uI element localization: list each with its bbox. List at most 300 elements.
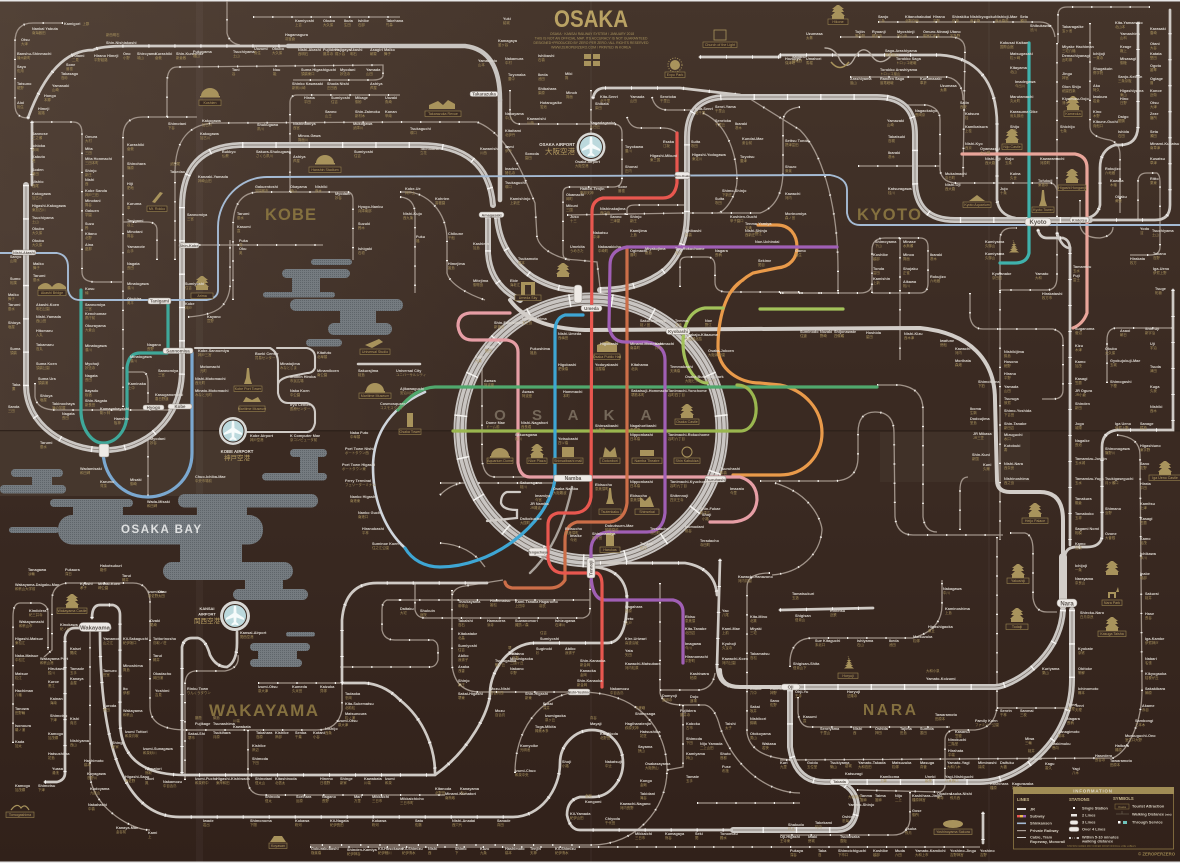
station labels: Hyogo north-west: 仏教 xyxy=(222,153,229,158)
station labels: Nara corridor: 猿投 xyxy=(1140,425,1147,430)
station labels: east Osaka and Kyoto: Imadegawa xyxy=(1015,80,1035,84)
station labels: Kobe: Minatogawa xyxy=(127,282,149,286)
station labels: Hyogo north-west: 福山 xyxy=(193,53,200,58)
station labels: Kobe: Tarumi xyxy=(33,274,45,278)
station labels: Kobe: 神戸三宮 xyxy=(198,352,212,357)
station labels: Hyogo north-west: Sumiyoshi xyxy=(185,282,204,286)
station labels: central Osaka north: Higashi-Yodogawa xyxy=(692,153,726,157)
station labels: Wakayama: 開成 xyxy=(70,650,77,655)
station labels: central Osaka north: 天六 xyxy=(675,250,682,255)
station labels: east Osaka and Kyoto: Hirakata xyxy=(1130,257,1145,261)
station labels: Nara corridor: Ikoma xyxy=(970,407,981,411)
station labels: Hyogo north-west: Minoo-Gawa xyxy=(298,134,321,138)
station labels: Wakayama: 太田 xyxy=(158,593,165,598)
station labels: east Osaka and Kyoto: 雄琴 xyxy=(1150,67,1157,72)
station labels: south Osaka and Wakayama: Mayaji xyxy=(590,722,602,726)
legend: stations column: 3 Lines xyxy=(1082,820,1095,824)
station labels: Kobe: Universal City xyxy=(396,369,421,373)
station labels: south Osaka and Wakayama: 中辻 xyxy=(605,763,612,768)
station labels: south Osaka and Wakayama: Nishi-Anadai xyxy=(452,819,475,823)
tourist attractions: Church of the Light xyxy=(705,43,735,47)
title: OSAKA xyxy=(554,6,628,33)
tourist attractions: Osaka Public Hall xyxy=(593,355,621,359)
station labels: east Osaka and Kyoto: Nishioji-Mae xyxy=(995,15,1017,19)
station labels: Hyogo north-west: Nishio xyxy=(32,180,44,184)
station labels: Hyogo north-west: 倉敷 xyxy=(127,146,134,151)
station labels: east Osaka and Kyoto: Daigo xyxy=(1118,115,1129,119)
station labels: south Osaka and Wakayama: 姫松 xyxy=(490,602,497,607)
station labels: central Osaka north: 山田丘 xyxy=(590,124,601,129)
station labels: central Osaka north: 中津 xyxy=(593,234,600,239)
station labels: central Osaka north: Juso xyxy=(570,215,579,219)
station labels: Wakayama: 下田 xyxy=(252,761,259,765)
station labels: central Osaka north: Shinjo xyxy=(630,215,642,219)
station labels: Hyogo north-west: Yamada xyxy=(366,68,380,72)
station labels: Wakayama: Nishijo xyxy=(325,727,338,731)
station labels: east Osaka and Kyoto: 今出川 xyxy=(1015,83,1026,88)
station labels: Kobe: Myohoji xyxy=(85,362,99,366)
station labels: central Osaka north: 関目 xyxy=(758,262,765,267)
station labels: east Osaka and Kyoto: Iwakura xyxy=(1093,95,1107,99)
station labels: central Osaka north: 山本 xyxy=(478,62,485,67)
station labels: Hyogo north-west: Shin-Kurashiki xyxy=(176,52,203,56)
station labels: south Osaka and Wakayama: 光明池 xyxy=(520,747,531,752)
station labels: Nara corridor: 長池 xyxy=(1075,442,1082,447)
station labels: central Osaka north: 塚本 xyxy=(518,260,525,265)
station labels: Wakayama: Wakayama Port xyxy=(40,657,68,661)
station labels: Kobe: 三宮 xyxy=(85,306,92,311)
station labels: east Osaka and Kyoto: Kowata xyxy=(1110,179,1124,183)
station labels: Nara corridor: Suminodo xyxy=(800,330,819,334)
station labels: Wakayama: Kawabata xyxy=(364,777,382,781)
station labels: inside loop: Shinsaibashi xyxy=(595,424,618,428)
station labels: east Osaka and Kyoto: 西京 xyxy=(965,145,972,150)
station labels: Nara corridor: 生駒 xyxy=(970,410,977,415)
station labels: Hyogo north-west: Shimotani xyxy=(168,122,186,126)
station labels: south Osaka and Wakayama: 新庄 xyxy=(458,682,465,687)
station labels: central Osaka north: 庄内 xyxy=(625,168,632,173)
station labels: Wakayama: Tarui xyxy=(122,574,131,578)
station labels: Hyogo north-west: Hiji xyxy=(127,182,133,186)
station labels: inside loop: 恵美須町 xyxy=(595,486,609,491)
station labels: central Osaka north: 池田 xyxy=(538,76,545,81)
station labels: east Osaka and Kyoto: Takaragaike xyxy=(1062,25,1084,29)
station labels: Hyogo north-west: Sayo xyxy=(17,65,26,69)
station labels: Hyogo north-west: 石垣 xyxy=(358,250,365,255)
station labels: south Osaka and Wakayama: 北野田 xyxy=(435,790,446,795)
station labels: south Osaka and Wakayama: 北野田 xyxy=(600,735,611,740)
station labels: Kobe: Minatojima xyxy=(280,362,300,366)
station labels: south Osaka and Wakayama: 西 xyxy=(428,851,432,855)
station labels: Wakayama: 北信太 xyxy=(275,780,286,785)
station labels: Kobe: Suminoe Koen xyxy=(372,542,399,546)
station labels: Hyogo north-west: Suzuki xyxy=(358,222,370,226)
station labels: inside loop: Momodani xyxy=(685,525,704,529)
station labels: central Osaka north: 十三 xyxy=(570,218,577,223)
station labels: Wakayama: 箱作 xyxy=(100,567,107,572)
station labels: Wakayama: 堺市 xyxy=(188,735,195,740)
station labels: Nara corridor: Kasagi xyxy=(1075,377,1087,381)
station labels: Hyogo north-west: Kobe xyxy=(185,302,194,306)
station labels: east Osaka and Kyoto: Takatsuki xyxy=(888,135,905,139)
station labels: Hyogo north-west: Akashi xyxy=(350,48,362,52)
station labels: east Osaka and Kyoto: Gojo xyxy=(1005,157,1014,161)
station labels: inside loop: Ebisucho xyxy=(595,483,612,487)
station labels: Wakayama: 九度山 xyxy=(90,790,101,795)
station labels: inside loop: 阿波座 xyxy=(522,393,533,398)
station labels: Kobe: Kaminaka xyxy=(128,382,146,386)
station labels: Kobe: Naka Koen xyxy=(290,389,310,393)
station labels: east Osaka and Kyoto: Kamishin xyxy=(873,277,890,281)
station labels: Wakayama: 貴志 xyxy=(70,720,77,725)
legend: symbols column: Walking Distance (min) xyxy=(1132,812,1172,816)
station labels: Kobe: Cosmosquare xyxy=(380,402,405,406)
station labels: Nara region west: ファミリー公園 xyxy=(975,722,999,727)
station labels: Wakayama: Higashi-Matsue xyxy=(15,637,43,641)
station labels: inside loop: Sakaisuji-Hommachi xyxy=(631,389,668,393)
station labels: south Osaka and Wakayama: Nishikori xyxy=(750,717,766,721)
station labels: east Osaka and Kyoto: 西院 xyxy=(960,104,967,109)
station labels: Nara corridor: Tsukigaseguchi xyxy=(1105,477,1133,481)
station labels: inside loop: Hommachi xyxy=(563,390,582,394)
station labels: south Osaka and Wakayama: 穴中 xyxy=(750,690,757,695)
station labels: Nara region west: 東丘 xyxy=(928,628,935,633)
interchange station boxes: Oji xyxy=(788,684,793,690)
station labels: Kobe: 長田 xyxy=(127,265,134,270)
station labels: Hyogo north-west: 妙法寺 xyxy=(340,71,351,76)
station labels: Nara region west: 大和上市 xyxy=(915,852,929,857)
station labels: inside loop: 新福島 xyxy=(494,324,505,329)
station labels: south Osaka and Wakayama: Kyuhoji xyxy=(722,642,736,646)
station labels: Wakayama: 泉大津 xyxy=(258,688,269,693)
station labels: central Osaka north: 豊津 xyxy=(740,158,747,163)
station labels: Nara corridor: 神楽坂 xyxy=(1012,785,1023,790)
station labels: Kobe: Suma xyxy=(10,347,20,351)
station labels: central Osaka north: 姫島 xyxy=(448,265,455,270)
station labels: east Osaka and Kyoto: Shojaku xyxy=(903,267,918,271)
station labels: Hyogo north-west: Minotani xyxy=(85,199,101,203)
station labels: east Osaka and Kyoto: 桂 xyxy=(965,115,969,120)
station labels: east Osaka and Kyoto: 木幡 xyxy=(1110,182,1117,187)
station labels: Hyogo north-west: Hirano Himeji xyxy=(94,54,118,58)
station labels: Hyogo north-west: 大久保 xyxy=(32,230,43,235)
station labels: inside loop: 心斎橋 xyxy=(595,427,606,432)
interchange station boxes: Nishi-Akashi xyxy=(13,251,35,255)
station labels: Nara corridor: 山田 xyxy=(1004,388,1011,393)
station labels: Nara corridor: 天理 xyxy=(1075,707,1082,712)
station labels: Nara region west: 王寺東 xyxy=(780,838,791,843)
station labels: south Osaka and Wakayama: Hagaromo xyxy=(539,600,558,604)
station labels: Hyogo north-west: 新倉敷 xyxy=(176,55,187,60)
station labels: inside loop: 大阪ビジネスパーク xyxy=(685,378,716,383)
tourist attractions: Kasuga Taisha xyxy=(1100,632,1124,636)
station labels: south Osaka and Wakayama: 百舌鳥西 xyxy=(490,690,504,695)
station labels: Wakayama: Hachiman xyxy=(15,689,33,693)
station labels: south Osaka and Wakayama: Takamatsu xyxy=(750,652,770,656)
station labels: Nara region west: Taima xyxy=(875,794,886,798)
station labels: south Osaka and Wakayama: 神野 xyxy=(770,690,777,695)
station labels: Nara corridor: Kuni xyxy=(983,463,991,467)
interchange station boxes: Takada xyxy=(833,780,847,784)
station labels: Nara corridor: Shijonawate xyxy=(834,330,856,334)
station labels: Hyogo north-west: Kakogawa xyxy=(200,132,219,136)
station labels: inside loop: 小路 xyxy=(702,516,709,521)
station labels: Nara region west: Asuka xyxy=(905,827,916,831)
station labels: Nara corridor: 下吉田 xyxy=(1004,412,1015,417)
station labels: south Osaka and Wakayama: Fukai xyxy=(543,702,553,706)
station labels: south Osaka and Wakayama: 佐藤 xyxy=(415,822,422,827)
station labels: south Osaka and Wakayama: Sakai xyxy=(750,705,760,709)
station labels: Wakayama: Nagano xyxy=(322,795,336,799)
station labels: Wakayama: Senba xyxy=(295,731,306,735)
title: DESIGNED+PRODUCED BY ZERO PER ZERO / ALL RIGHTS RESERVED xyxy=(534,41,649,45)
station labels: Wakayama: Tarui xyxy=(153,654,162,658)
station labels: Nara corridor: 津田 xyxy=(1150,368,1157,373)
station labels: Nara corridor: Shin-Tanabe xyxy=(1004,422,1027,426)
station labels: central Osaka north: 薫台前 xyxy=(742,140,753,145)
station labels: central Osaka north: Himejima xyxy=(448,262,465,266)
station labels: Hyogo north-west: Konan xyxy=(385,110,397,114)
station labels: Kobe: Nishi-Yamada xyxy=(36,315,61,319)
station labels: Nara region west: Yamato-Koizumi xyxy=(926,677,956,681)
station labels: south Osaka and Wakayama: Kongo xyxy=(640,779,652,783)
station labels: east Osaka and Kyoto: Utano xyxy=(950,30,961,34)
station labels: Wakayama: Nishiyama xyxy=(70,739,89,743)
station labels: east Osaka and Kyoto: 柘植 xyxy=(1155,290,1162,295)
station labels: central Osaka north: Nakayama xyxy=(505,112,524,116)
station labels: central Osaka north: 香櫨園 xyxy=(435,200,446,205)
interchange station boxes: Wakayama xyxy=(80,625,111,631)
station labels: Hyogo north-west: Hagamagura xyxy=(285,33,308,37)
station labels: east Osaka and Kyoto: 枚方市 xyxy=(1042,295,1053,300)
station labels: east Osaka and Kyoto: Myoshinji xyxy=(897,30,915,34)
station labels: south Osaka and Wakayama: Yata xyxy=(625,649,633,653)
station labels: south Osaka and Wakayama: Sumiyoshi xyxy=(540,637,559,641)
interchange station boxes: Nara xyxy=(1060,601,1074,607)
station labels: Wakayama: Izumisano xyxy=(148,590,167,594)
station labels: inside loop: Osaka Business Park xyxy=(685,375,724,379)
station labels: Wakayama: 貝塚 xyxy=(320,688,327,693)
station labels: east Osaka and Kyoto: 貴船口 xyxy=(1093,123,1103,128)
station labels: Wakayama: Kotani xyxy=(313,731,325,735)
station labels: Kobe: みなと元町 xyxy=(195,392,213,397)
station labels: east Osaka and Kyoto: Nishikyogoku xyxy=(970,15,995,19)
station labels: central Osaka north: Ogimachi xyxy=(630,249,647,253)
tourist attractions: Heijo Palace xyxy=(1025,519,1045,523)
station labels: east Osaka and Kyoto: 富田 xyxy=(873,270,880,275)
station labels: Kobe: Nanko Guchi xyxy=(358,511,381,515)
station labels: south Osaka and Wakayama: Wakasa xyxy=(762,742,776,746)
station labels: Wakayama: 岩出 xyxy=(203,822,210,827)
tourist attractions: Hanshin Stadium xyxy=(311,168,339,172)
station labels: east Osaka and Kyoto: 三条 xyxy=(878,18,885,23)
station labels: inside loop: 四天王寺 xyxy=(670,497,684,502)
station labels: south Osaka and Wakayama: 浅香 xyxy=(458,668,465,673)
station labels: central Osaka north: Senri-Yama xyxy=(715,105,736,109)
station labels: central Osaka north: 伊丹 xyxy=(505,148,512,153)
station labels: Wakayama: Kishibe xyxy=(275,731,289,735)
legend: lines column: Shinkansen xyxy=(1030,820,1052,826)
station labels: Hyogo north-west: Mita Honmachi xyxy=(85,157,112,161)
station labels: south Osaka and Wakayama: 道場 xyxy=(690,698,697,703)
station labels: central Osaka north: 川西 xyxy=(527,121,534,125)
station labels: Hyogo north-west: 播州新町 xyxy=(17,55,31,60)
station labels: Hyogo north-west: Kitano xyxy=(85,232,97,236)
station labels: east Osaka and Kyoto: トロッコ嵐山 xyxy=(880,71,901,76)
station labels: south Osaka and Wakayama: Himematsu xyxy=(490,599,510,603)
station labels: east Osaka and Kyoto: 阿久 xyxy=(1093,87,1100,92)
station labels: east Osaka and Kyoto: Randen Saga xyxy=(880,77,904,81)
station labels: Nara region west: Sue Kitaguchi xyxy=(815,639,840,643)
station labels: Nara corridor: Sakurai xyxy=(1145,592,1159,596)
station labels: Wakayama: 鳥取ノ荘 xyxy=(153,640,167,645)
station labels: inside loop: Teradacho xyxy=(700,539,719,543)
station labels: Hyogo north-west: 三之瀬 xyxy=(32,135,43,140)
station labels: Wakayama: Izumi-Sunagawa xyxy=(143,747,173,751)
station labels: Hyogo north-west: 西木 xyxy=(315,188,322,193)
station labels: south Osaka and Wakayama: 真田 xyxy=(497,822,504,827)
station labels: Kobe: Iryo Center xyxy=(290,403,310,407)
station labels: central Osaka north: 中崎町 xyxy=(598,248,609,253)
station labels: Nara corridor: 久爾 xyxy=(983,466,990,471)
station labels: south Osaka and Wakayama: 久宝寺 xyxy=(722,645,733,650)
station labels: central Osaka north: 立花 xyxy=(420,150,427,155)
station labels: central Osaka north: 豊川 xyxy=(625,148,632,153)
station labels: Kobe: Hanshin xyxy=(114,417,129,421)
station labels: Nara corridor xyxy=(800,327,1167,790)
station labels: Wakayama: Kanaya-Mae xyxy=(116,826,138,830)
station labels: central Osaka north: Yuki xyxy=(503,17,511,21)
station labels: Hyogo north-west: 庄田西 xyxy=(327,86,338,90)
station labels: inside loop: 桜川 xyxy=(515,436,522,441)
station labels: Hyogo north-west: Tanigami xyxy=(127,219,143,223)
station labels: Nara corridor: Inabe xyxy=(1140,572,1150,576)
station labels: south Osaka and Wakayama: Dojo xyxy=(690,695,698,699)
station labels: central Osaka north: Gamo xyxy=(795,249,806,253)
station labels: central Osaka north: Okamachi xyxy=(566,193,584,197)
station labels: Wakayama: 金屋 xyxy=(70,680,77,685)
station labels: south Osaka and Wakayama: 南熊取 xyxy=(445,795,456,800)
station labels: Nara corridor: Makimuku xyxy=(1052,742,1071,746)
station labels: south Osaka and Wakayama: Hatsushiba xyxy=(640,730,660,734)
station labels: Nara region west: 信貴山 xyxy=(795,617,806,622)
station labels: Hyogo north-west: Shinohara xyxy=(127,162,146,166)
station labels: Kobe: 垂水 xyxy=(8,306,15,311)
interchange station boxes: Tanigami xyxy=(150,298,169,304)
station labels: Kobe: Wadamisaki xyxy=(80,467,102,471)
station labels: Nara region west: 尺土 xyxy=(788,826,795,831)
station labels: central Osaka north: 吹田 xyxy=(691,143,698,148)
station labels: Nara corridor: Kamitsu xyxy=(1140,502,1155,506)
station labels: central Osaka north: Suita xyxy=(691,140,700,144)
station labels: Wakayama: 蛭川 xyxy=(48,670,55,675)
station labels: east Osaka and Kyoto: 瀬田 xyxy=(1020,18,1027,23)
station labels: Wakayama: Hatsushima xyxy=(48,752,70,756)
station labels: south Osaka and Wakayama: 堺東 xyxy=(458,695,465,700)
station labels: Nara region west: 西 xyxy=(853,731,857,735)
station labels: Nara region west: 深谷 xyxy=(790,852,797,857)
station labels: Nara region west: Sakurai xyxy=(1028,757,1042,761)
station labels: central Osaka north: 千船 xyxy=(448,235,455,240)
tourist attractions: Todaiji xyxy=(1012,625,1022,629)
tourist attractions: Mt. Rokko xyxy=(149,207,165,211)
station labels: east Osaka and Kyoto: 保津峡 xyxy=(785,60,796,65)
station labels: inside loop: 北浜 xyxy=(631,366,638,371)
station labels: Nara corridor: 上津 xyxy=(1140,505,1147,510)
region labels xyxy=(209,206,922,720)
station labels: Wakayama: Kii-Nagata xyxy=(330,819,349,823)
station labels: central Osaka north: 千里丘 xyxy=(715,122,726,127)
station labels: east Osaka and Kyoto: Katsura xyxy=(965,112,979,116)
station labels: Wakayama: Kinokawa xyxy=(60,623,78,627)
station labels: Hyogo north-west: Ashiya xyxy=(370,82,382,86)
station labels: Hyogo north-west: 住吉 xyxy=(331,99,338,104)
station labels: Nara region west: 飛鳥西 xyxy=(950,795,961,800)
station labels: Nara region west: 橿原 xyxy=(990,785,997,790)
station labels: east Osaka and Kyoto: 扇 xyxy=(1150,80,1154,85)
station labels: Nara corridor: Nishinoshima xyxy=(1004,477,1029,481)
station labels: inside loop: Higobashi xyxy=(558,363,576,367)
station labels: Nara corridor: 加茂 xyxy=(1075,363,1082,368)
station labels: Nara corridor: Murouguchi-Ono xyxy=(1125,734,1156,738)
station labels: Nara region west: 壺阪 xyxy=(840,838,847,843)
station labels: Wakayama: 西条 xyxy=(325,730,332,735)
station labels: Nara region west xyxy=(780,587,1133,857)
station labels: Wakayama: 上 xyxy=(148,834,152,839)
station labels: Hyogo north-west: Tsuchiyama xyxy=(233,50,255,54)
station labels: south Osaka and Wakayama: Shoji xyxy=(562,760,571,764)
station labels: south Osaka and Wakayama: 千代田 xyxy=(605,820,616,825)
station labels: Hyogo north-west: 妙谷 xyxy=(335,195,342,200)
station labels: Nara region west: 飛鳥 xyxy=(905,830,912,835)
station labels: Wakayama: りんくうタウン xyxy=(187,690,211,695)
station labels: south Osaka and Wakayama: 金岡 xyxy=(580,672,587,677)
station labels: Nara region west: Yamato-Kamiichi xyxy=(915,849,946,853)
station labels: Wakayama: Kada xyxy=(15,740,24,744)
station labels: Nara region west: 松塚 xyxy=(913,638,920,643)
station labels: Hyogo north-west: Ashiya xyxy=(293,155,305,159)
station labels: Hyogo north-west: 石部 xyxy=(358,23,365,27)
station labels: Kobe: 湊川 xyxy=(127,285,134,290)
station labels: inside loop: Tanimachi-Rokuchome xyxy=(668,433,710,437)
station labels: Kobe: 高丸 xyxy=(36,346,43,351)
station labels: Hyogo north-west: Okubo xyxy=(32,227,44,231)
station labels: Kobe: Taka xyxy=(12,383,20,387)
station labels: Nara region west: Tsubosaka xyxy=(840,835,860,839)
legend: lines column: Private Railway xyxy=(1030,828,1059,833)
station labels: Nara corridor: Kizu xyxy=(1075,344,1083,348)
station labels: east Osaka and Kyoto: Ishida xyxy=(1118,130,1129,134)
station labels: Wakayama: 八幡 xyxy=(15,692,22,697)
station labels: Hyogo north-west: 西明石 xyxy=(298,52,309,56)
station labels: Wakayama: 黒江 xyxy=(48,683,55,688)
station labels: Nara region west: Shimoichiguchi xyxy=(838,849,866,853)
station labels: east Osaka and Kyoto: 高槻 xyxy=(888,138,895,143)
interchange station boxes xyxy=(12,92,1089,784)
station labels: Hyogo north-west: Aioi xyxy=(17,101,24,105)
station labels: south Osaka and Wakayama: Yao xyxy=(722,609,729,613)
station labels: Hyogo north-west: Myodani xyxy=(335,192,350,196)
station labels: east Osaka and Kyoto: 五条 xyxy=(1005,160,1012,165)
station labels: Kobe: 和田岬 xyxy=(80,470,91,475)
station labels: east Osaka and Kyoto: Kino xyxy=(1093,110,1101,114)
station labels: Nara region west: Tawaramoto xyxy=(1110,759,1132,763)
station labels: Hyogo north-west: Kakogawa xyxy=(32,192,51,196)
station labels: east Osaka and Kyoto: Nagaokakyo xyxy=(915,109,937,113)
station labels: Nara corridor: Sagami Nomi xyxy=(1075,527,1099,531)
station labels: Nara corridor: JR小倉 xyxy=(1075,392,1087,397)
station labels: Wakayama xyxy=(15,564,404,856)
